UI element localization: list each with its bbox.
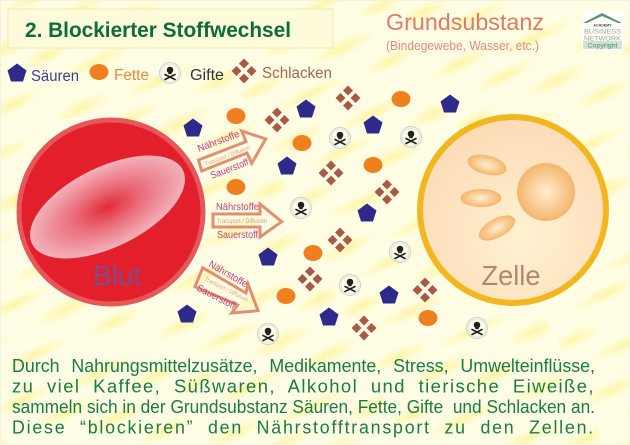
legend: Säuren <box>8 64 79 85</box>
arrow: bottom: Nährstoffe <box>206 259 250 290</box>
cell <box>420 117 606 303</box>
scattered Säuren <box>178 94 460 326</box>
body text: Durch Nahrungsmittelzusätze, Medikamente, Stress, Umwelteinflüsse, <box>12 356 595 376</box>
arrow: top: Transport / Diffusion <box>205 145 252 168</box>
logo: Academy Business Network: BUSINESS <box>584 28 621 36</box>
legend: Schlacken: Schlacken <box>262 65 332 82</box>
body text: sammeln sich in der Grundsubstanz Säuren, Fette, Gifte und Schlacken an. <box>12 397 595 417</box>
body text: zu viel Kaffee, Süßwaren, Alkohol und tierische Eiweiße, <box>12 376 595 396</box>
arrow: bottom: Transport / Diffusion <box>203 276 249 304</box>
label: Zelle: Zelle <box>482 260 540 291</box>
legend <box>8 58 332 85</box>
arrow: top: Nährstoffe <box>196 129 242 155</box>
arrow: top: Sauerstoff <box>209 157 251 182</box>
arrow: middle: Nährstoffe <box>216 202 259 213</box>
title box <box>8 9 333 48</box>
legend: Fette: Fette <box>114 67 149 84</box>
scattered Schlacken <box>264 86 438 340</box>
arrow: bottom <box>195 259 258 313</box>
legend: Fette <box>90 64 149 84</box>
arrow: middle: Transport / Diffusion <box>217 219 267 225</box>
nucleus <box>517 163 575 221</box>
logo: Academy Business Network: NETWORK <box>584 36 622 42</box>
arrow: top <box>196 129 266 182</box>
scattered Gifte <box>258 126 488 344</box>
title box: 2. Blockierter Stoffwechsel <box>25 19 291 42</box>
scattered Fette <box>226 91 438 326</box>
legend: Gifte <box>160 62 224 84</box>
logo: Academy Business Network <box>582 10 623 51</box>
label: Blut: Blut <box>93 260 141 291</box>
arrow: middle: Sauerstoff <box>217 230 258 241</box>
arrow: middle <box>213 202 282 241</box>
legend: Gifte: Gifte <box>190 67 224 84</box>
logo: Academy Business Network: Copyright <box>588 42 618 50</box>
heading: Grundsubstanz <box>386 9 544 53</box>
blood cell <box>14 120 203 304</box>
logo: Academy Business Network: ACADEMY <box>593 24 612 28</box>
legend: Schlacken <box>232 58 332 84</box>
body text <box>12 356 595 438</box>
heading: Grundsubstanz: Grundsubstanz <box>386 9 544 35</box>
legend: Säuren: Säuren <box>31 68 79 85</box>
body text: Diese “blockieren” den Nährstofftransport zu den Zellen. <box>12 418 595 438</box>
heading: Grundsubstanz: (Bindegewebe, Wasser, etc.) <box>386 38 539 53</box>
arrow: bottom: Sauerstoff <box>195 283 237 312</box>
organelles <box>460 151 519 246</box>
